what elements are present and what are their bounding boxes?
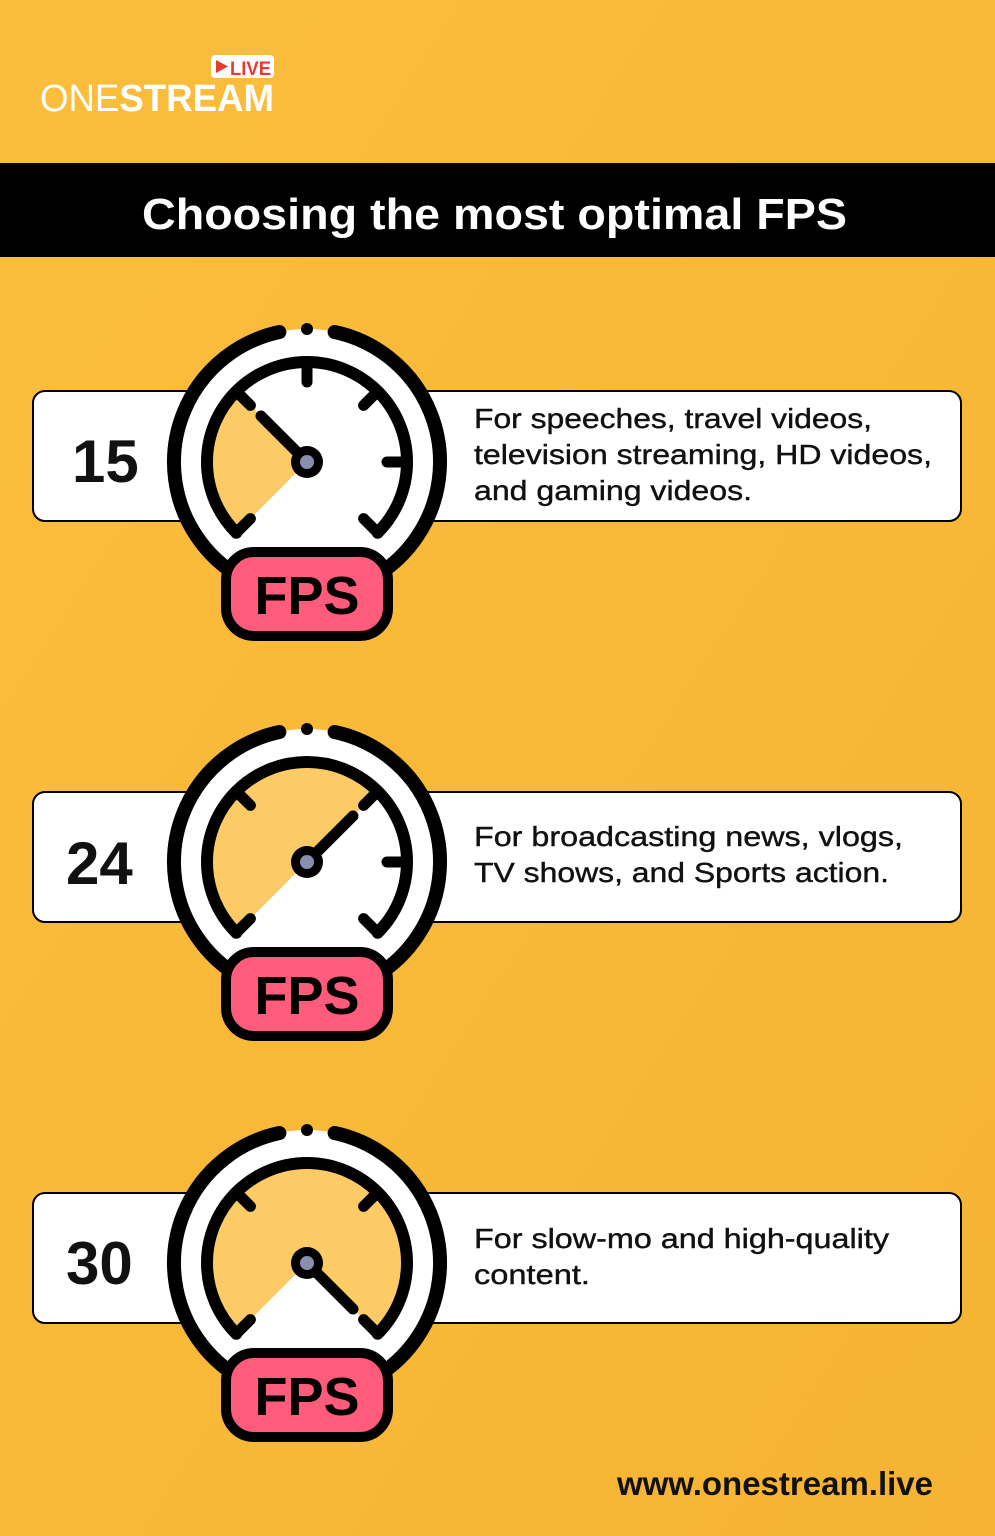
text: 15 fps description: television streaming, HD videos, [474, 439, 932, 470]
footer url: www.onestream.live [616, 1465, 933, 1502]
text: 30 fps description: For slow-mo and high-quality [474, 1223, 889, 1254]
text: 15 fps description: and gaming videos. [474, 475, 752, 506]
row 3: 30 fps: 30 [66, 1230, 133, 1297]
gauge: 30 fps [174, 1124, 440, 1437]
logo: LIVE [230, 59, 271, 80]
row 2: 24 fps [33, 792, 961, 922]
title bar [0, 163, 995, 257]
row 1: 15 fps [33, 391, 961, 521]
gauge: 15 fps: FPS [254, 566, 360, 626]
text: 15 fps description: For speeches, travel videos, [474, 403, 872, 434]
row 1: 15 fps: 15 [72, 428, 139, 495]
row 2: 24 fps: 24 [66, 830, 133, 897]
text: 24 fps description: TV shows, and Sports action. [474, 857, 889, 888]
text: 30 fps description: content. [474, 1259, 590, 1290]
title bar: Choosing the most optimal FPS [142, 190, 847, 239]
gauge: 15 fps [174, 323, 440, 636]
gauge: 24 fps: FPS [254, 966, 360, 1026]
logo: ONESTREAM [40, 78, 274, 120]
gauge: 30 fps: FPS [254, 1367, 360, 1427]
text: 24 fps description: For broadcasting news, vlogs, [474, 821, 903, 852]
logo [40, 55, 274, 120]
gauge: 24 fps [174, 723, 440, 1036]
row 3: 30 fps [33, 1193, 961, 1323]
